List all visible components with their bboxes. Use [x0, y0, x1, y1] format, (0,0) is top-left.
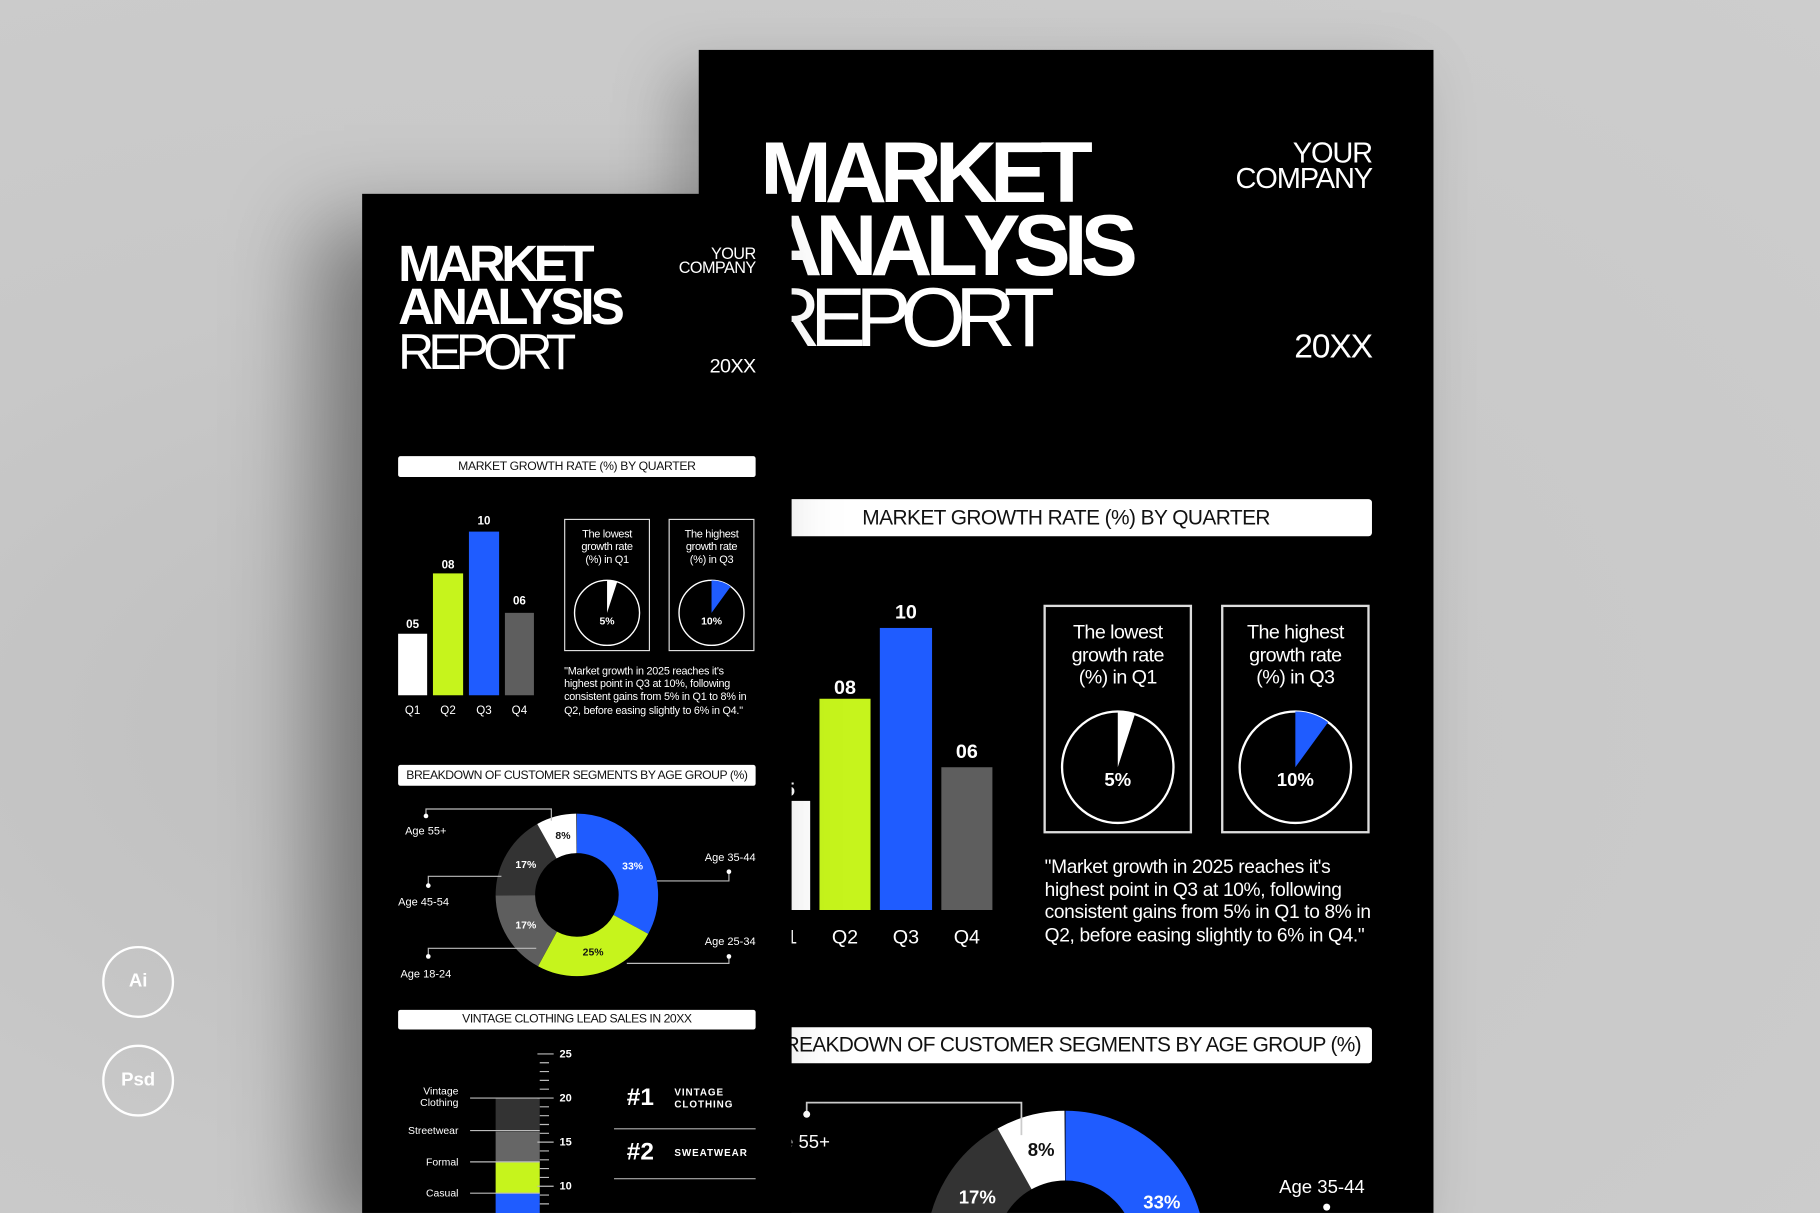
heading: vintage clothing — [398, 1010, 756, 1030]
ranking list: SWEATWEAR — [674, 1147, 748, 1158]
quote text: highest point in Q3 at 10%, following — [564, 678, 730, 690]
badge: Psd: Psd — [121, 1070, 155, 1090]
card: highest growth: growth rate — [1249, 644, 1342, 666]
pie: 5% — [574, 580, 640, 646]
ranking list: #1 — [627, 1084, 654, 1111]
badge: Psd — [102, 1045, 174, 1117]
company name — [679, 244, 756, 276]
title: back: MARKET — [760, 124, 1086, 221]
ranking list: VINTAGE — [674, 1086, 724, 1098]
heading: customer segments: BREAKDOWN OF CUSTOMER SEGMENTS BY AGE GROUP (%) — [771, 1033, 1361, 1056]
donut chart: age groups — [760, 1102, 1365, 1213]
company name: COMPANY — [679, 258, 756, 276]
card: highest growth: (%) in Q3 — [1256, 666, 1334, 688]
bar chart: quarterly growth: Q1 — [771, 926, 797, 948]
heading: customer segments — [760, 1027, 1372, 1063]
donut chart: age groups: 17% — [515, 921, 536, 932]
bar chart: quarterly growth: 06 — [513, 595, 526, 608]
bar chart: quarterly growth: 05 — [406, 619, 419, 631]
card: lowest growth: (%) in Q1 — [585, 554, 629, 566]
card: highest growth: (%) in Q3 — [690, 554, 733, 566]
quote text: "Market growth in 2025 reaches it's — [1045, 857, 1330, 877]
title: back: REPORT — [760, 272, 1044, 364]
card: lowest growth: The lowest — [582, 528, 632, 541]
heading: customer segments — [398, 765, 756, 786]
company name: YOUR — [711, 244, 756, 262]
card: lowest growth — [564, 519, 650, 651]
card: lowest growth: growth rate — [581, 541, 633, 554]
title: back: ANALYSIS — [760, 197, 1131, 294]
donut chart: age groups: Age 45-54 — [398, 896, 449, 908]
bar chart: quarterly growth: 06 — [956, 741, 978, 763]
pie: 5%: 5% — [1104, 769, 1132, 790]
donut chart: age groups: Age 35-44 — [1279, 1176, 1365, 1197]
pie: 10%: 10% — [1277, 769, 1314, 790]
donut chart: age groups: 17% — [515, 860, 536, 871]
stacked bar chart: sales by category — [408, 1048, 572, 1213]
stacked bar chart: sales by category: 15 — [559, 1137, 572, 1149]
card: highest growth: The highest — [685, 528, 738, 541]
heading: market growth: MARKET GROWTH RATE (%) BY QUARTER — [458, 460, 696, 474]
title: back — [760, 124, 1135, 364]
quote text — [564, 665, 746, 716]
card: lowest growth: The lowest — [1073, 621, 1163, 643]
donut chart: age groups: Age 35-44 — [705, 852, 756, 864]
donut chart: age groups: Age 25-34 — [705, 936, 756, 948]
quote text: consistent gains from 5% in Q1 to 8% in — [564, 691, 746, 703]
badge: Ai — [102, 946, 174, 1018]
card: highest growth — [669, 519, 754, 651]
title: front: REPORT — [398, 325, 570, 381]
heading: market growth: MARKET GROWTH RATE (%) BY QUARTER — [862, 506, 1270, 529]
bar chart: quarterly growth: 10 — [895, 601, 917, 623]
quote text: Q2, before easing slightly to 6% in Q4." — [564, 704, 743, 716]
year: 20XX — [710, 355, 756, 377]
stacked bar chart: sales by category: Clothing — [420, 1098, 459, 1109]
ranking list: #2 — [627, 1139, 654, 1165]
card: lowest growth: growth rate — [1072, 644, 1164, 666]
donut chart: age groups: 17% — [959, 1187, 996, 1208]
stacked bar chart: sales by category: Streetwear — [408, 1126, 459, 1137]
company name — [1236, 137, 1372, 195]
card: lowest growth: (%) in Q1 — [1079, 666, 1157, 688]
title: front: MARKET — [398, 236, 590, 292]
stacked bar chart: sales by category: 20 — [559, 1093, 572, 1105]
card: highest growth: growth rate — [686, 541, 737, 554]
bar chart: quarterly growth: Q4 — [954, 926, 980, 948]
donut chart: age groups: 33% — [622, 861, 643, 872]
donut chart: age groups: 33% — [1143, 1191, 1181, 1212]
bar chart: quarterly growth: Q2 — [440, 705, 456, 717]
quote text: highest point in Q3 at 10%, following — [1045, 879, 1342, 900]
stacked bar chart: sales by category: 25 — [559, 1048, 572, 1060]
stacked bar chart: sales by category: Casual — [426, 1189, 458, 1200]
bar chart: quarterly growth: 10 — [478, 515, 490, 528]
bar chart: quarterly growth: 05 — [773, 779, 795, 801]
company name: COMPANY — [1236, 162, 1372, 195]
bar chart: quarterly growth: Q2 — [832, 926, 858, 948]
donut chart: age groups — [398, 808, 756, 980]
quote text: Q2, before easing slightly to 6% in Q4." — [1045, 925, 1364, 945]
panel: front document (small) — [362, 194, 792, 1213]
quote text — [1045, 857, 1371, 946]
bar chart: quarterly growth — [398, 515, 534, 717]
company name: YOUR — [1293, 137, 1372, 169]
heading: market growth — [398, 456, 756, 477]
heading: market growth — [760, 499, 1372, 536]
title: front — [398, 236, 623, 381]
bar chart: quarterly growth: 08 — [834, 677, 856, 699]
card: highest growth — [1221, 605, 1370, 833]
pie: 10% — [1238, 710, 1352, 824]
stacked bar chart: sales by category: Formal — [426, 1157, 458, 1168]
pie: 5%: 5% — [600, 616, 615, 627]
pie: 10%: 10% — [701, 616, 722, 627]
heading: vintage clothing: VINTAGE CLOTHING LEAD SALES IN 20XX — [462, 1012, 692, 1026]
panel: back document (large) — [699, 50, 1433, 1213]
donut chart: age groups: Age 18-24 — [400, 968, 451, 980]
ranking list — [614, 1084, 756, 1180]
bar chart: quarterly growth: 08 — [442, 559, 454, 572]
bar chart: quarterly growth: Q4 — [512, 705, 527, 717]
donut chart: age groups: 25% — [583, 947, 604, 958]
bar chart: quarterly growth: Q3 — [476, 705, 492, 717]
bar chart: quarterly growth: Q3 — [893, 926, 919, 948]
quote text: consistent gains from 5% in Q1 to 8% in — [1045, 902, 1371, 923]
ranking list: CLOTHING — [674, 1097, 733, 1109]
card: highest growth: The highest — [1247, 621, 1344, 643]
donut chart: age groups: Age 55+ — [405, 826, 446, 838]
stacked bar chart: sales by category: 10 — [559, 1181, 572, 1193]
badge: Ai: Ai — [129, 972, 147, 991]
stacked bar chart: sales by category: Vintage — [423, 1087, 459, 1098]
quote text: "Market growth in 2025 reaches it's — [564, 665, 724, 677]
bar chart: quarterly growth: Q1 — [405, 705, 420, 717]
card: lowest growth — [1043, 605, 1192, 833]
donut chart: age groups: Age 55+ — [760, 1131, 830, 1152]
donut chart: age groups: 8% — [1028, 1139, 1055, 1160]
bar chart: quarterly growth — [771, 601, 992, 948]
title: front: ANALYSIS — [398, 279, 621, 335]
year: 20XX — [1294, 328, 1372, 366]
heading: customer segments: BREAKDOWN OF CUSTOMER SEGMENTS BY AGE GROUP (%) — [406, 768, 747, 782]
donut chart: age groups: 8% — [555, 831, 570, 842]
pie: 10% — [678, 580, 745, 646]
pie: 5% — [1060, 710, 1175, 824]
